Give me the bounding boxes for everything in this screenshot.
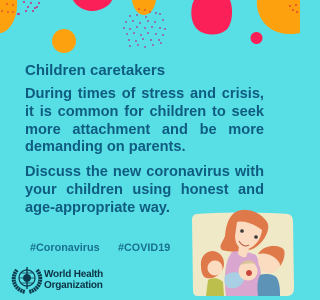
mother face xyxy=(235,221,262,250)
red blob top right xyxy=(191,0,232,35)
paragraph: discuss coronavirus: Discuss the new coronavirus with xyxy=(25,164,264,180)
girl face xyxy=(208,260,222,276)
mother neck xyxy=(238,246,249,257)
baby body xyxy=(224,272,244,288)
paragraph: stress and attachment: more attachment and be more xyxy=(25,122,264,138)
WHO emblem xyxy=(12,267,42,294)
paragraph: stress and attachment: demanding on parents. xyxy=(25,139,186,155)
orange circle left xyxy=(52,29,76,53)
red blob top centre-left xyxy=(73,0,112,11)
paragraph: stress and attachment: During times of stress and crisis, xyxy=(25,86,264,102)
paragraph: discuss coronavirus: age-appropriate way. xyxy=(25,200,170,216)
red small circle xyxy=(250,32,262,44)
mother hair xyxy=(220,210,268,252)
WHO wordmark: Organization xyxy=(44,280,103,291)
illustration: mother with children xyxy=(192,210,294,296)
dot cluster top left xyxy=(17,1,40,15)
boy face xyxy=(258,253,280,273)
WHO wordmark xyxy=(44,269,103,291)
paragraph: stress and attachment xyxy=(25,86,264,155)
baby head xyxy=(238,262,258,280)
paragraph: discuss coronavirus: your children using honest and xyxy=(25,182,264,198)
heading: Children caretakers xyxy=(25,62,165,79)
paragraph: stress and attachment: it is common for children to seek xyxy=(25,104,264,120)
orange blob top right corner xyxy=(257,0,300,34)
boy hair xyxy=(258,246,285,266)
paragraph: discuss coronavirus xyxy=(25,164,264,216)
orange blob top left xyxy=(0,0,17,33)
orange blob top middle xyxy=(132,0,156,15)
girl hair xyxy=(201,251,224,278)
boy shirt xyxy=(257,274,280,296)
mother dress xyxy=(225,251,261,296)
WHO wordmark: World Health xyxy=(44,269,103,280)
hashtag: COVID19: #COVID19 xyxy=(118,242,170,254)
girl dress xyxy=(206,278,224,296)
mother smile xyxy=(239,241,249,246)
mother eyes xyxy=(240,229,258,239)
dot cluster top centre xyxy=(123,12,166,48)
dots on orange blobs xyxy=(1,3,298,13)
beige panel xyxy=(192,212,294,296)
hashtag: Coronavirus: #Coronavirus xyxy=(30,242,100,254)
